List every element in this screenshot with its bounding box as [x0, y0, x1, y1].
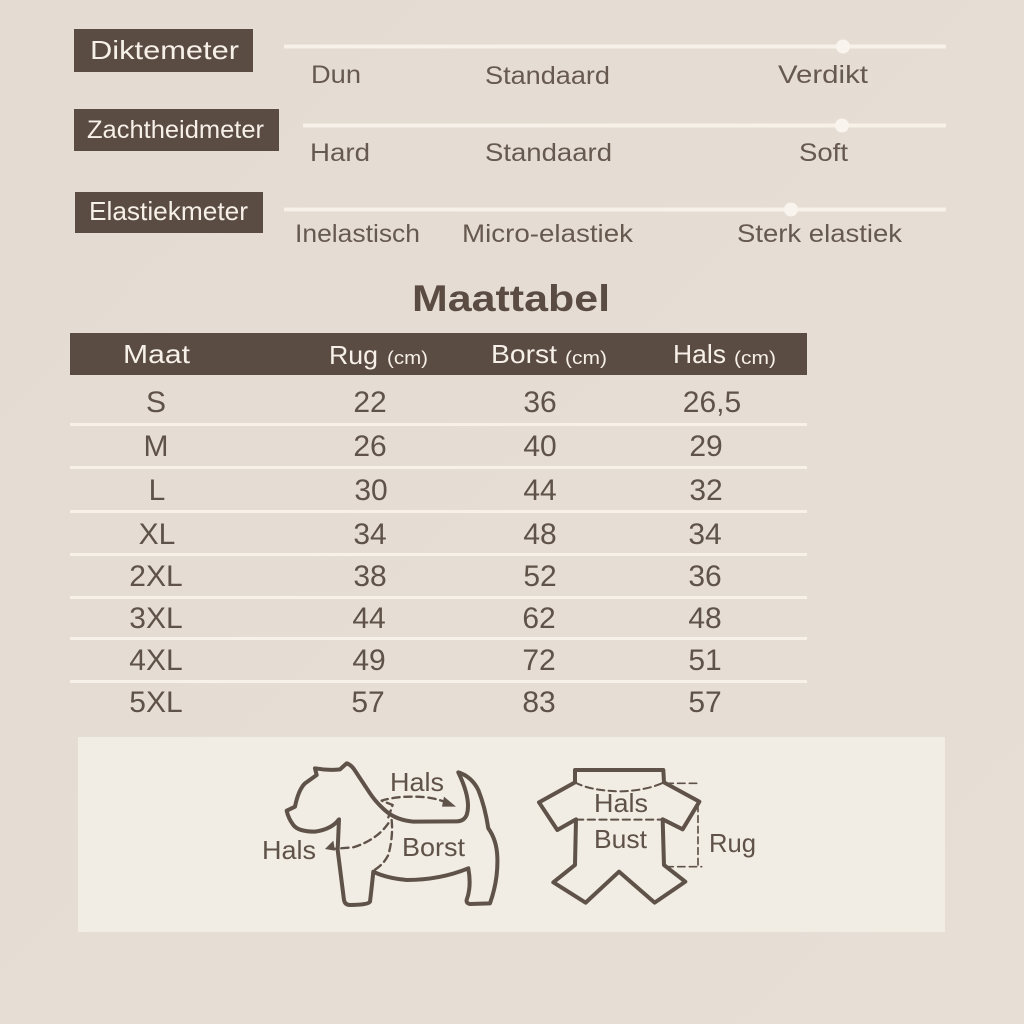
row S: 26,5: [683, 386, 741, 419]
row 5XL: 57: [688, 686, 722, 719]
row 3XL: 62: [522, 602, 556, 635]
row 4XL: [129, 644, 722, 677]
label: Hals: Hals: [594, 788, 648, 818]
table header: Rug: [329, 340, 378, 370]
label: Diktemeter: Diktemeter: [90, 35, 239, 65]
scale labels: Dun: [311, 61, 361, 89]
table header: Maat: [123, 339, 191, 369]
row 5XL: [129, 686, 722, 719]
row L: 44: [523, 474, 557, 507]
row S: [146, 386, 741, 419]
row 5XL: 57: [351, 686, 385, 719]
row S: 22: [353, 386, 387, 419]
label: Hals top: Hals: [390, 767, 444, 797]
row XL: 48: [523, 518, 557, 551]
row XL: [139, 518, 722, 551]
row S: 36: [523, 386, 557, 419]
row M: [144, 430, 723, 463]
icon: garment with measurement lines: [539, 770, 756, 903]
row XL: XL: [139, 518, 175, 551]
scale labels: Standaard: [485, 139, 612, 167]
scale labels: Inelastisch: [295, 220, 420, 248]
scale labels: [295, 220, 903, 248]
row L: 32: [689, 474, 723, 507]
scale labels: Hard: [310, 139, 370, 167]
meter: Elastiekmeter: [75, 192, 946, 248]
row 2XL: 38: [353, 560, 387, 593]
label: Elastiekmeter: [75, 192, 263, 233]
meter: Diktemeter: [74, 29, 946, 90]
scale labels: Standaard: [485, 62, 610, 90]
scale labels: Soft: [799, 139, 848, 167]
row M: 40: [523, 430, 557, 463]
row 3XL: [129, 602, 722, 635]
row L: L: [149, 474, 165, 507]
row 5XL: 83: [522, 686, 556, 719]
row L: 30: [354, 474, 388, 507]
table header: Borst: [491, 339, 558, 369]
meter: Zachtheidmeter: [74, 109, 946, 167]
row 2XL: 36: [688, 560, 722, 593]
row 3XL: 48: [688, 602, 722, 635]
row M: 26: [353, 430, 387, 463]
scale labels: [311, 61, 868, 90]
label: Bust: Bust: [594, 824, 648, 854]
label: Zachtheidmeter: Zachtheidmeter: [87, 116, 264, 144]
row 4XL: 72: [522, 644, 556, 677]
scale labels: Sterk elastiek: [737, 220, 903, 248]
row 3XL: 44: [352, 602, 386, 635]
title: Maattabel: [412, 278, 610, 319]
row 2XL: [129, 560, 722, 593]
label: Zachtheidmeter: [74, 109, 279, 151]
row S: S: [146, 386, 166, 419]
size table: [70, 333, 807, 719]
label: Hals left: Hals: [262, 835, 316, 865]
label: Elastiekmeter: Elastiekmeter: [89, 196, 248, 226]
row XL: 34: [353, 518, 387, 551]
panel: measuring diagrams: [78, 737, 945, 932]
slider track with marker: [284, 40, 946, 54]
scale labels: Micro-elastiek: [462, 220, 634, 248]
label: Rug: Rug: [709, 828, 756, 858]
row 2XL: 2XL: [129, 560, 183, 593]
icon: dog with measurement lines: [262, 763, 497, 905]
row XL: 34: [688, 518, 722, 551]
table header: (cm): [565, 348, 607, 368]
label: Diktemeter: [74, 29, 253, 72]
row dividers: [70, 423, 807, 683]
scale labels: [310, 139, 848, 167]
row 2XL: 52: [523, 560, 557, 593]
row M: M: [144, 430, 168, 463]
table header: (cm): [387, 348, 428, 368]
row L: [149, 474, 723, 507]
row 5XL: 5XL: [129, 686, 183, 719]
row M: 29: [689, 430, 723, 463]
slider track with marker: [303, 118, 946, 132]
label: Borst: Borst: [402, 832, 466, 862]
row 4XL: 4XL: [129, 644, 183, 677]
row 4XL: 51: [688, 644, 722, 677]
scale labels: Verdikt: [778, 61, 868, 89]
table header: Hals: [673, 339, 726, 369]
table header: (cm): [734, 348, 776, 368]
slider track with marker: [284, 202, 946, 216]
table header: [70, 333, 807, 375]
row 4XL: 49: [352, 644, 386, 677]
row 3XL: 3XL: [129, 602, 183, 635]
